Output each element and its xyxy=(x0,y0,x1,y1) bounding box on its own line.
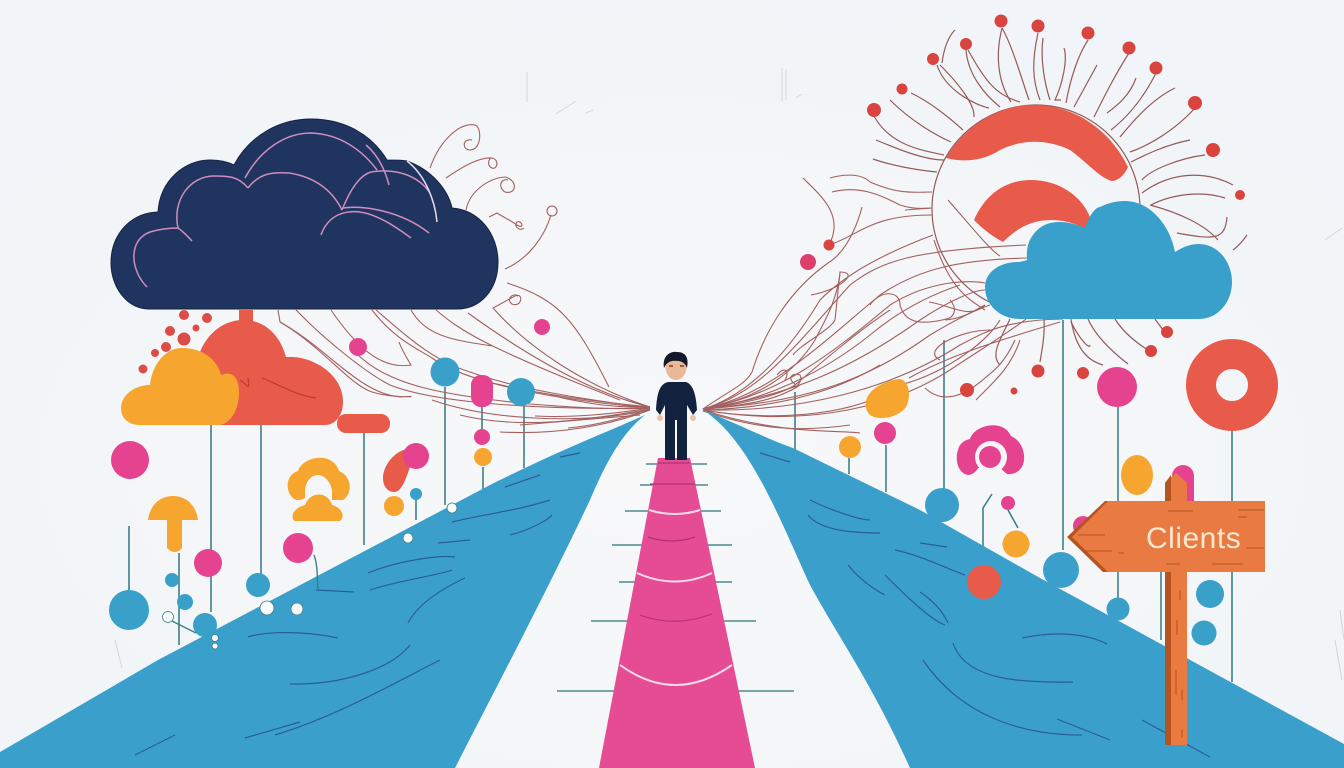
red and orange clouds xyxy=(121,310,343,425)
hair xyxy=(664,352,688,368)
right blue road xyxy=(703,410,1344,768)
road surface xyxy=(703,410,1344,768)
post xyxy=(1165,473,1187,745)
upper cloud arch xyxy=(288,458,350,500)
dark arcs xyxy=(640,463,712,621)
red and pink comma xyxy=(383,448,413,492)
lower cloud xyxy=(293,494,343,521)
red cloud xyxy=(200,320,343,425)
road ripples xyxy=(135,453,580,755)
pink comma head xyxy=(403,443,429,469)
hands xyxy=(657,415,696,421)
face xyxy=(666,354,686,380)
sign board xyxy=(1072,501,1265,572)
cloud contour lines xyxy=(134,133,437,287)
left balloons xyxy=(109,319,550,649)
blue dots xyxy=(1192,580,1224,646)
curl end xyxy=(547,206,557,216)
wood grain xyxy=(1078,510,1264,738)
white arcs xyxy=(620,510,732,685)
body xyxy=(656,382,697,460)
signpost xyxy=(1067,473,1265,745)
stems left xyxy=(129,387,524,645)
big arc xyxy=(946,105,1128,181)
road bumps xyxy=(925,488,1130,620)
red seed dots xyxy=(138,310,212,374)
sun ring and rays xyxy=(873,28,1247,365)
right fan of thin lines xyxy=(703,175,1063,433)
road ripples xyxy=(760,453,1210,757)
flower ring xyxy=(975,441,1007,473)
pink flower cloud xyxy=(957,425,1024,475)
red donut xyxy=(1201,354,1263,416)
pink dots xyxy=(111,319,550,577)
stem cap xyxy=(239,310,253,322)
sign board shade xyxy=(1067,501,1112,572)
small arc xyxy=(974,180,1090,242)
road surface xyxy=(0,415,645,768)
post shade xyxy=(1165,475,1171,745)
eyes xyxy=(669,365,684,367)
white dots xyxy=(162,503,457,649)
person xyxy=(656,352,697,460)
right balloons xyxy=(839,354,1263,646)
left fan of thin lines xyxy=(278,125,650,433)
red ball xyxy=(967,565,1001,599)
stems right xyxy=(795,320,1232,682)
pinkish red dot xyxy=(800,254,816,270)
orange blob xyxy=(866,379,909,418)
path surface xyxy=(599,458,755,768)
pink balloon xyxy=(1097,367,1137,407)
orange dots xyxy=(839,436,1153,558)
pink dots xyxy=(874,422,1093,536)
cloud body xyxy=(111,119,498,309)
rungs across the path xyxy=(557,464,794,691)
orange cloud icon xyxy=(288,458,350,521)
dark connector xyxy=(172,555,318,633)
sun seed dots xyxy=(824,14,1245,397)
orange cloud xyxy=(121,348,239,425)
dark storm cloud xyxy=(111,119,498,309)
blue cloud xyxy=(985,201,1232,319)
sign label: Clients xyxy=(1146,522,1241,555)
pink pill xyxy=(1172,465,1194,515)
orange dots xyxy=(384,448,492,516)
faint sketch marks xyxy=(115,68,1344,680)
pink path xyxy=(599,458,755,768)
flower center xyxy=(979,446,1001,468)
orange mushroom xyxy=(148,496,198,552)
blue dots xyxy=(109,358,535,637)
red cloud lines xyxy=(240,378,316,398)
sun arcs xyxy=(946,105,1128,242)
red bar xyxy=(337,414,390,433)
left blue road xyxy=(0,415,645,768)
